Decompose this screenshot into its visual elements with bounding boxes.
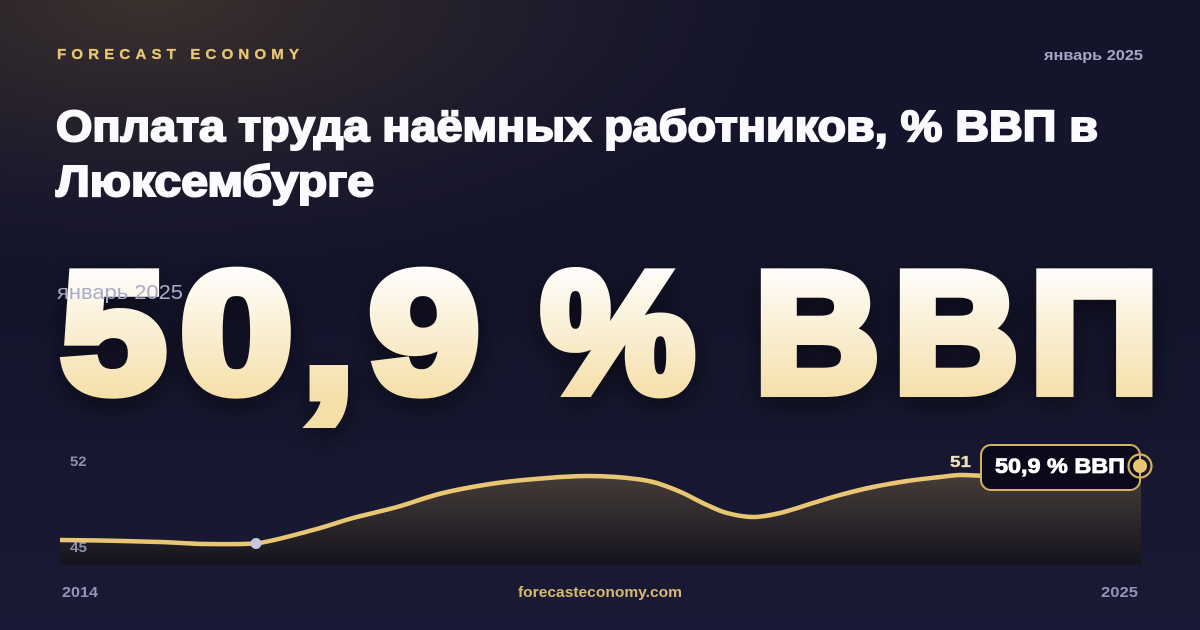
date label top right: январь 2025 bbox=[1044, 48, 1143, 64]
big value: , bbox=[302, 242, 354, 433]
big value: В bbox=[894, 238, 1018, 428]
end year label: 2025 bbox=[1101, 584, 1138, 601]
big value: % bbox=[541, 238, 694, 428]
line chart bbox=[60, 475, 1141, 565]
big value: П bbox=[1030, 238, 1159, 428]
big value bbox=[61, 238, 1159, 433]
peak value label: 51 bbox=[950, 454, 971, 471]
axis max label: 52 bbox=[70, 453, 87, 469]
chart area fill bbox=[60, 475, 1141, 565]
axis min label: 45 bbox=[70, 539, 87, 555]
value callout pill: 50,9 % ВВП bbox=[995, 455, 1125, 478]
title: Оплата труда наёмных работников, % ВВП в bbox=[56, 102, 1098, 151]
low point marker bbox=[250, 538, 262, 549]
title bbox=[56, 102, 1098, 206]
big value: 9 bbox=[369, 238, 479, 428]
chart line bbox=[60, 475, 985, 544]
big value: 0 bbox=[181, 238, 293, 428]
title: Люксембурге bbox=[56, 157, 374, 206]
brand label: FORECAST ECONOMY bbox=[57, 46, 299, 63]
start year label: 2014 bbox=[62, 584, 99, 601]
value callout pill bbox=[981, 445, 1140, 490]
big value: 5 bbox=[61, 238, 166, 428]
end point marker bbox=[1128, 454, 1152, 478]
source link: forecasteconomy.com bbox=[518, 585, 682, 601]
overlay date label: январь 2025 bbox=[57, 282, 183, 304]
big value: В bbox=[755, 238, 879, 428]
